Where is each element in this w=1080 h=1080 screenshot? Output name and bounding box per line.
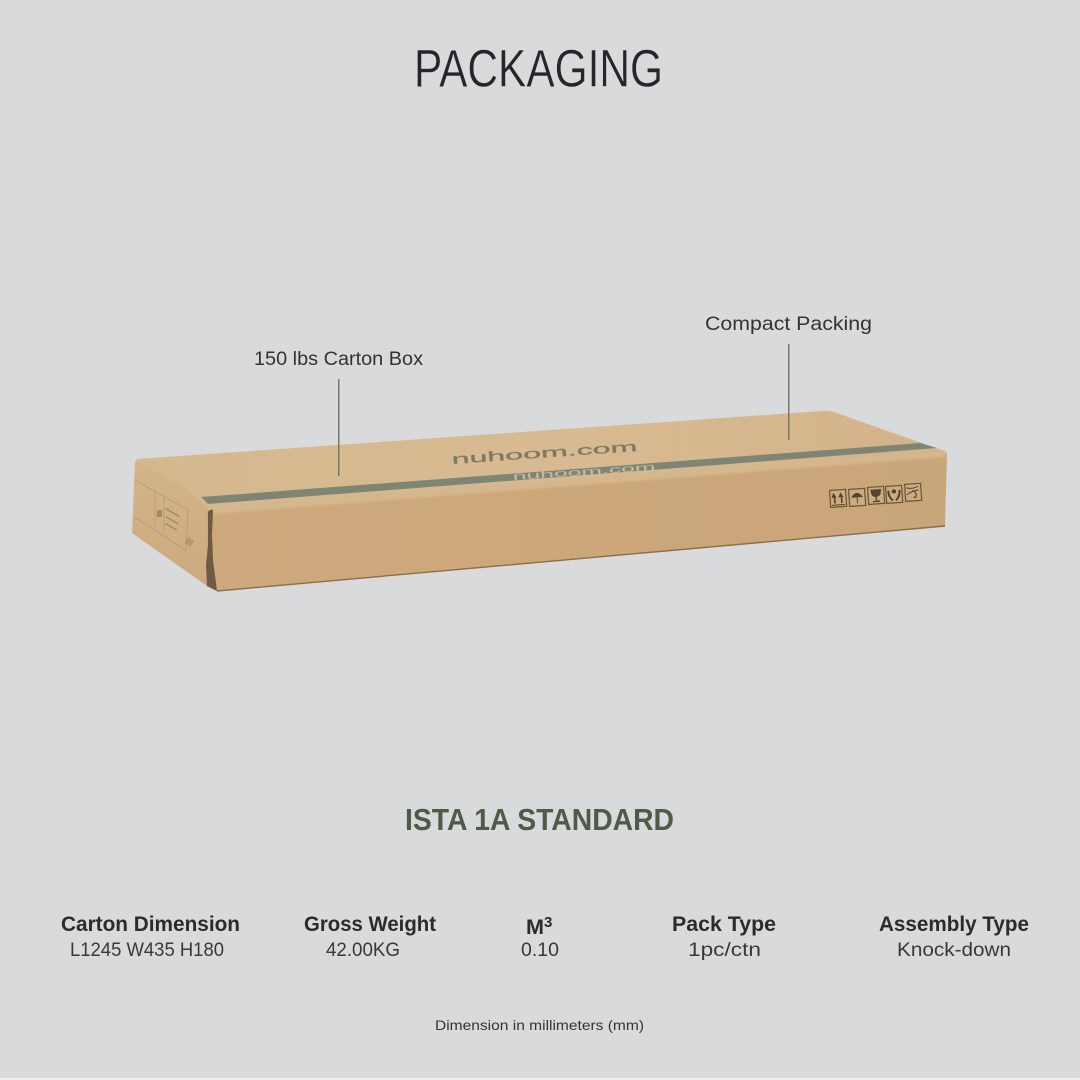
title: PACKAGING [414,40,663,98]
spec: assembly type: Knock-down [897,940,1011,961]
icon: this way up [830,489,847,507]
icon: keep dry [849,488,866,506]
spec: cubic metres: 3 [544,914,552,931]
spec: gross weight [304,913,436,961]
spec: pack type: Pack Type [672,913,776,936]
spec: cubic metres: 0.10 [521,940,559,961]
spec: carton dimension [61,913,240,961]
spec: assembly type [879,913,1029,961]
bottom edge strip [0,1078,1080,1080]
box top face [137,411,947,510]
spec: gross weight: 42.00KG [326,940,400,961]
spec: carton dimension: L1245 W435 H180 [70,940,224,961]
icon: do not cut [905,483,922,501]
tape text: nuhoom.com [512,461,656,482]
spec: cubic metres [521,914,559,961]
packing tape [201,443,937,504]
front bottom edge [217,526,945,591]
carton box [132,411,947,591]
spec: pack type [672,913,776,961]
spec: assembly type: Assembly Type [879,913,1029,936]
corrugated corner seam [206,510,217,591]
top brand text: nuhoom.com [451,439,638,468]
box front face [205,453,947,591]
callout: compact packing: Compact Packing [705,314,872,335]
front crease highlight [209,451,946,514]
spec: carton dimension: Carton Dimension [61,913,240,936]
footnote: Dimension in millimeters (mm) [435,1017,644,1033]
spec: pack type: 1pc/ctn [688,940,761,961]
handling icons [830,483,922,507]
icon: handle with care [886,485,903,503]
standard heading: ISTA 1A STANDARD [405,802,674,837]
box left end face [132,459,212,586]
icon: fragile [868,486,885,504]
callout: 150 lbs carton box: 150 lbs Carton Box [254,349,424,370]
specifications row [61,913,1029,961]
spec: cubic metres: M [526,916,544,939]
spec: gross weight: Gross Weight [304,913,436,936]
